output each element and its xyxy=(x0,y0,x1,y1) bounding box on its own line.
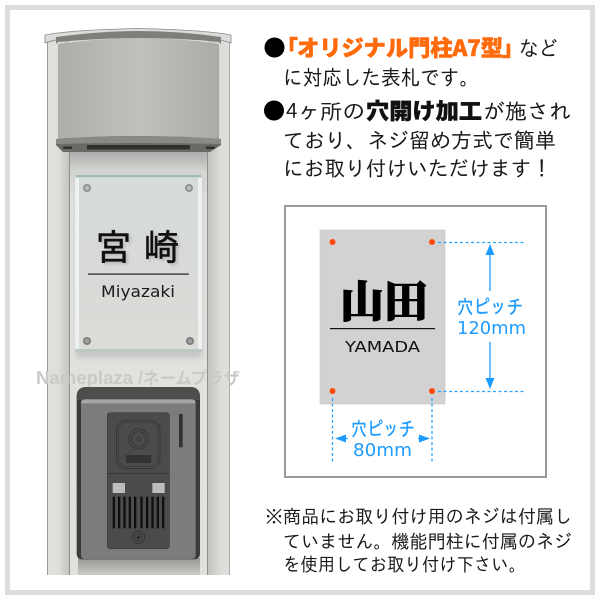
label: 120mm pitch: 穴ピッチ xyxy=(457,297,523,317)
sample plate xyxy=(320,230,445,404)
line five: にお取り付けいただけます！ xyxy=(283,158,552,179)
text block: description xyxy=(264,31,571,179)
label: 80mm pitch: 穴ピッチ xyxy=(351,419,415,439)
dashed guides xyxy=(332,242,524,462)
pillar top cap xyxy=(45,28,231,43)
bullet one xyxy=(264,38,284,58)
text block: footnote: ていません。機能門柱に付属のネジ xyxy=(283,532,572,551)
diagram frame xyxy=(285,206,546,477)
label: 120mm pitch xyxy=(457,297,526,339)
diagram: hole pitch xyxy=(285,206,546,477)
label: 80mm pitch xyxy=(351,419,415,461)
watermark xyxy=(36,368,240,388)
label: 120mm pitch: 120mm xyxy=(457,318,526,339)
line one tail: など xyxy=(519,38,558,59)
sample romaji: YAMADA xyxy=(344,338,421,356)
highlighted product name: 「 xyxy=(276,31,298,63)
intercom face xyxy=(81,399,196,559)
watermark: Nameplaza xyxy=(36,368,134,388)
camera panel xyxy=(107,413,169,549)
camera lens group xyxy=(117,421,160,469)
curved metal housing xyxy=(56,31,221,152)
pillar body xyxy=(47,38,230,575)
housing light slot xyxy=(87,145,190,150)
bullet two xyxy=(264,100,284,120)
illustration: gate pillar with nameplate xyxy=(36,28,240,575)
sample kanji: 山田 xyxy=(340,266,428,330)
intercom housing xyxy=(77,387,200,559)
bold phrase: 穴開け加工 xyxy=(366,94,482,126)
plate divider xyxy=(88,274,189,275)
panel: acrylic nameplate xyxy=(75,175,202,358)
housing screws xyxy=(63,146,215,149)
plate name romaji: Miyazaki xyxy=(101,282,175,301)
line four: ており、ネジ留め方式で簡単 xyxy=(283,130,556,151)
watermark: ネームプラザ xyxy=(143,369,240,388)
plate screws xyxy=(83,184,194,345)
buttons xyxy=(113,483,125,493)
text block: footnote: を使用してお取り付け下さい。 xyxy=(283,555,526,574)
highlighted product name: オリジナル門柱A7型 xyxy=(297,31,503,63)
highlighted product name: 」 xyxy=(502,31,524,63)
call button xyxy=(132,531,145,544)
label: 80mm pitch: 80mm xyxy=(353,440,412,461)
plate name shadow: 宮崎 xyxy=(98,222,181,273)
icon: door intercom xyxy=(77,387,200,559)
speaker grille xyxy=(113,497,164,528)
arrow: horizontal pitch xyxy=(335,434,430,442)
mounting holes xyxy=(330,239,435,394)
text block: footnote: ※商品にお取り付け用のネジは付属し xyxy=(265,507,572,526)
line three tail: が施され xyxy=(483,101,571,122)
text block: footnote xyxy=(265,507,572,574)
sample divider xyxy=(330,328,435,329)
watermark: / xyxy=(138,368,143,388)
arrow: vertical pitch xyxy=(486,244,494,389)
line three start: 4ヶ所の xyxy=(286,101,365,122)
line two: に対応した表札です。 xyxy=(283,67,479,88)
indicator slot xyxy=(179,414,183,447)
plate name kanji: 宮崎 xyxy=(96,220,179,271)
